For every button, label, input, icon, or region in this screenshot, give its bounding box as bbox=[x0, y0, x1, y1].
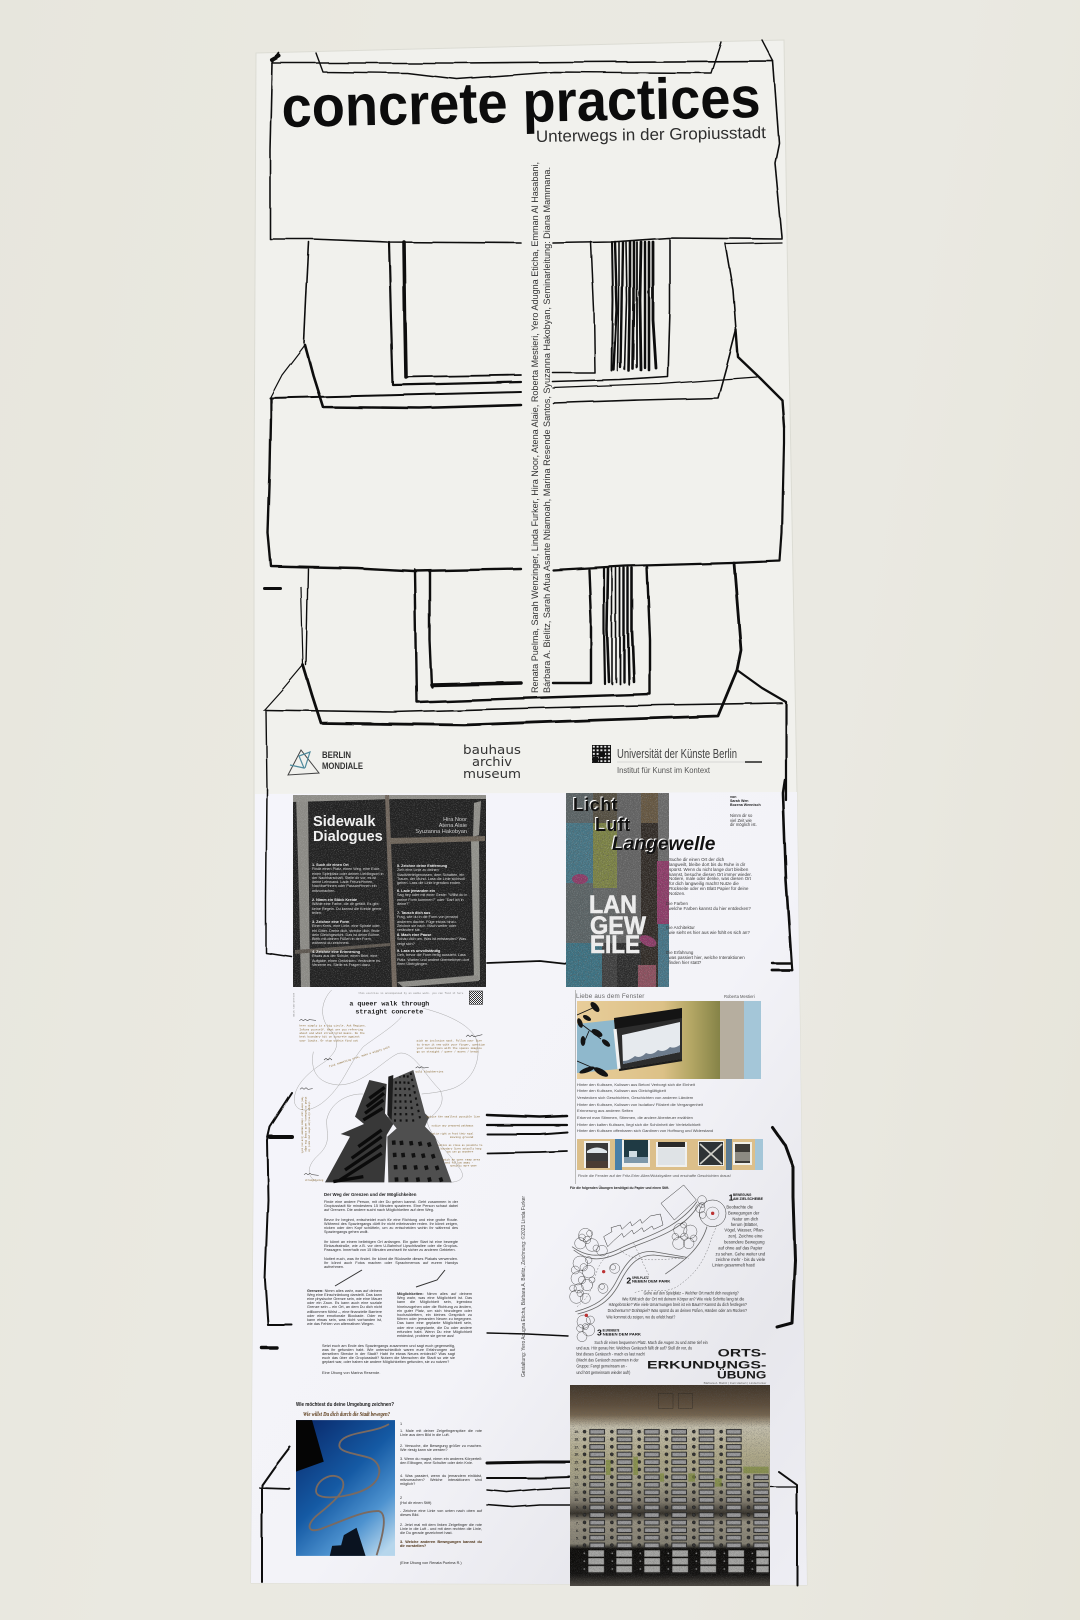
text: station 3 bbox=[576, 1340, 708, 1375]
intro paragraphs: Ihr könnt an einem beliebigen Ort anfangen. Ein guter Start ist eine bewegte Einkaufsstraße, wie z.B. vor dem U-Bahnhof Lipschitzallee oder die Gropius-Passagen. Innerhalb von 15 Minuten wechselt ihr sicher zu anderen Gebieten. bbox=[324, 1240, 458, 1252]
floor numbers: 7. bbox=[576, 1521, 579, 1525]
panel: Licht Luft Langewelle bbox=[566, 793, 761, 987]
upper window bbox=[389, 242, 521, 385]
vertical credits: Renata Puelma, Sarah Wenzinger, Linda Furker, Hira Noor, Atena Alaie, Roberta Mestieri, Yero Adugna Eticha, Emman Al Hasabani, bbox=[530, 162, 541, 693]
text: station 3: (Macht das Geräusch zusammen in der bbox=[576, 1357, 639, 1362]
intro paragraphs: Bevor ihr beginnt, entscheidet euch für eine Richtung und eine grobe Route. Während des Spaziergangs dürft ihr nicht miteinander reden. Ihr könnt zeigen, nicken oder den Kopf schütteln, um zu entscheiden wohin ihr während des Spaziergangs gehen wollt. bbox=[324, 1218, 458, 1234]
heading: Wie möchtest du deine Umgebung zeichnen? bbox=[296, 1402, 394, 1408]
text: station 2: Gehe auf den Spielplatz – Welcher Ort macht dich neugierig? bbox=[643, 1291, 739, 1296]
title words: Luft bbox=[595, 815, 631, 835]
pointer lines bbox=[334, 1270, 446, 1288]
Moeglichkeiten column: Möglichkeiten: Nimm alles auf deinem Weg wahr, was eine Möglichkeit ist. Das kann die Möglichkeit sein, irgendwo hineinzugehen oder die Richtung zu ändern, ein guter Platz, um sich hinzulegen oder hochzuklettern, ein kleines Gespräch zu führen oder jemanden Neuen zu begegnen. Das kann eine geplante Möglichkeit sein, oder eine ungeplante, die Du oder andere erfunden habt. Wenn Du eine Möglichkeit entdeckst, probiere sie gerne aus! bbox=[397, 1292, 472, 1338]
moss patches bbox=[606, 1457, 769, 1487]
orange walk notes: notice right on front their equal bbox=[432, 1132, 474, 1136]
instruction text: Notizen. bbox=[669, 891, 685, 896]
steps right column: Sag hey oder mit einer Geste: "Willst du in meine Form kommen?" oder "Darf ich in deine?" bbox=[397, 893, 467, 906]
orange walk notes: notice the smallest possible line bbox=[427, 1114, 480, 1118]
text: station 3: bist dieses Geräusch - mach es laut nach! bbox=[576, 1352, 645, 1357]
glitched word LANGEWEILE: LAN bbox=[589, 891, 637, 919]
authors: Syuzanna Hakobyan bbox=[415, 829, 467, 835]
QR code bbox=[469, 991, 483, 1004]
floor numbers: 4. bbox=[576, 1544, 579, 1548]
orange walk notes: go on straight / queer / moves / bends bbox=[417, 1050, 479, 1054]
steps left column: 1. Such dir einen Ort bbox=[312, 863, 349, 867]
orange walk notes: to trace it new with your finger, question bbox=[417, 1042, 486, 1046]
orange walk notes: stand in between, walk along the edge bbox=[304, 1097, 308, 1152]
poem lines: Hinter den Kulissen, Kulissen aus Gleichgültigkeit bbox=[577, 1088, 666, 1093]
orange walk notes: boundary lines actually hang bbox=[441, 1146, 482, 1150]
floor numbers: 8. bbox=[576, 1514, 579, 1518]
steps left column: Einen Kreis, eine Linie, eine Spirale oder ein Gitter. Drehe dich, strecke dich, finde dein Gleichgewicht. Das ist deine Bühne. Bleib mit deinen Füßen in der Form, während du zeichnest. bbox=[312, 924, 380, 945]
map: paths bbox=[572, 1202, 707, 1314]
logo: Berlin Mondiale: MONDIALE bbox=[322, 761, 363, 772]
title: Orts-Erkundungs-Uebung: ORTS- bbox=[717, 1348, 767, 1360]
wandering route lines bbox=[294, 990, 478, 1182]
steps left column: Etwas aus der Schule, einen Brief, eine Aufgabe, einen Gedanken. Verändere es. Verzerre es. Stelle es Fragen dazu. bbox=[312, 954, 381, 967]
instructions first part: 1 bbox=[400, 1422, 402, 1426]
text: station 1: auf ohne auf das Papier bbox=[718, 1245, 763, 1250]
steps right column: Geh, bevor die Form fertig aussieht. Lass Platz. Warten und andere übernehmen dort ihren Übergängen. bbox=[397, 953, 469, 966]
tower photograph: left block bbox=[325, 1080, 393, 1182]
text: station 1: zeichne mehr - bis du viele bbox=[715, 1257, 765, 1262]
logos row bbox=[287, 742, 762, 781]
instructions second part: 3. Welche anderen Bewegungen kannst du dir vorstellen? bbox=[400, 1540, 482, 1548]
poem lines: Erinnerung aus anderen Seiten bbox=[577, 1108, 633, 1113]
instruction text bbox=[666, 857, 752, 965]
steps right column: 8. Mach eine Pause bbox=[397, 933, 431, 937]
orange walk notes: Inform yourself. What are you referring bbox=[299, 1027, 363, 1031]
title: Orts-Erkundungs-Uebung bbox=[647, 1348, 767, 1381]
floor numbers: 14. bbox=[574, 1468, 579, 1472]
small sign bbox=[658, 1393, 692, 1408]
credits and note: dir möglich ist. bbox=[730, 822, 757, 827]
instruction text: wie sieht es hier aus wie fühlt es sich an? bbox=[668, 930, 750, 935]
heading: station 1 bbox=[728, 1193, 763, 1203]
orange walk notes: you can go anywhere bbox=[447, 1150, 474, 1154]
instruction text: was passiert hier, welche Interaktionen bbox=[668, 955, 745, 960]
map: trees bbox=[569, 1196, 706, 1342]
logo: bauhaus archiv museum: archiv bbox=[472, 754, 513, 769]
text: station 3: Such dir einen bequemen Platz. Mach die Augen zu und atme tief ein bbox=[594, 1340, 708, 1345]
title words: Licht bbox=[573, 795, 618, 815]
panel rule bbox=[574, 990, 577, 1184]
exercise credit: Eine Übung von Marina Resende. bbox=[322, 1370, 380, 1375]
instruction text: finden hier statt? bbox=[668, 960, 701, 965]
vertical credits bbox=[530, 162, 553, 693]
authors: Atena Alaie bbox=[439, 823, 467, 829]
heading: station 2 bbox=[626, 1275, 670, 1285]
poem lines: Hinter den Kulissen, Kulissen aus Beton/ Verborgt sich die Einheit bbox=[577, 1082, 695, 1086]
audio walk note: this exercise is accompanied by an audio walk. you can find it here bbox=[358, 991, 463, 995]
logo: Berlin Mondiale bbox=[288, 750, 363, 775]
orange walk notes: your connections with the spaces imagine bbox=[417, 1046, 482, 1050]
text: station 2 bbox=[606, 1291, 747, 1320]
steps right column: Frag, wie du in die Form von jemand anderem dachte. Füge etwas hinzu. Zeichne sie nach. Mach weiter oder verändere sie. bbox=[397, 915, 458, 932]
logo: Universitaet der Kuenste Berlin: Institut für Kunst im Kontext bbox=[617, 766, 711, 775]
panel: Sidewalk Dialogues bbox=[293, 795, 486, 987]
panel title: straight concrete bbox=[355, 1008, 423, 1016]
instructions second part: 2 bbox=[400, 1496, 402, 1500]
text: station 1: Natur um dich bbox=[732, 1216, 759, 1221]
orange walk notes: notice any prepared pathways bbox=[432, 1124, 474, 1128]
panel: Orts-Erkundungs-Übung bbox=[569, 1184, 767, 1385]
panel: Der Weg der Grenzen und der Möglichkeiten bbox=[307, 1192, 472, 1375]
floor numbers: 12. bbox=[574, 1483, 579, 1487]
text: station 3: Gruppe: Fangt gemeinsam an - bbox=[576, 1363, 627, 1368]
orange walk notes: your limits. Or stop within find out bbox=[299, 1038, 358, 1042]
floor numbers: 10. bbox=[574, 1498, 579, 1502]
credits and note bbox=[730, 795, 761, 827]
map: building outlines bbox=[603, 1185, 696, 1247]
panel title bbox=[349, 1000, 429, 1016]
orange walk notes: notice as close as possible to bbox=[438, 1143, 483, 1147]
tower photograph: right block bbox=[387, 1070, 452, 1182]
steps right column: 5. Zeichne deine Entfernung bbox=[397, 864, 447, 868]
orange walk notes: and follow away - bbox=[445, 1160, 474, 1164]
intro paragraphs: Notiert euch, was ihr findet. Ihr könnt die Rückseite dieses Plakats verwenden. Ihr könnt auch Fotos machen oder Sprachmemos auf eurem Handys aufnehmen. bbox=[324, 1257, 458, 1269]
orange walk notes: straightening bbox=[305, 1178, 324, 1182]
steps right column: 7. Tausch dich aus bbox=[397, 911, 430, 915]
handwritten markers bbox=[299, 1019, 482, 1175]
intro paragraphs: Finde eine andere Person, mit der Du gehen kannst. Geht zusammen in der Gropiusstadt für mindestens 15 Minuten spazieren. Eine Person schaut dabei auf Grenzen. Die andere sucht nach Möglichkeiten auf dem Weg. bbox=[324, 1200, 458, 1212]
instructions first part: 3. Wenn du magst, nimm ein anderes Körperteil: den Ellbogen, eine Schulter oder dein Knie. bbox=[400, 1457, 482, 1465]
credits and note: Sarah Wen bbox=[730, 799, 749, 803]
upper column bbox=[304, 242, 309, 343]
text: station 3: und hört gemeinsam wieder auf!) bbox=[576, 1370, 631, 1375]
lower column bbox=[306, 567, 308, 665]
orange walk notes: about and what street/grid means. Do the bbox=[299, 1031, 365, 1035]
floor numbers: 19. bbox=[574, 1430, 579, 1434]
text: station 2: Hängebrücke? Wie viele Umarmungen breit ist ein Baum? Kannst du dich festlegen? bbox=[608, 1302, 747, 1307]
instructions second part bbox=[400, 1496, 482, 1565]
glitched word LANGEWEILE bbox=[589, 891, 646, 959]
logo: Universitaet der Kuenste Berlin: Universität der Künste Berlin bbox=[617, 746, 737, 761]
heading: station 2: SPIELPLATZ bbox=[632, 1276, 649, 1280]
intro paragraphs bbox=[324, 1200, 458, 1269]
instruction text: Rückseite oder ein Blatt Papier für deine bbox=[669, 886, 748, 891]
steps right column: 9. Lass es unvollständig bbox=[397, 949, 440, 953]
poem lines: Hinter den Kulissen offenbaren sich Gardinen von Hoffnung und Widerstand bbox=[577, 1128, 713, 1133]
text: station 1: besondere Bewegung bbox=[724, 1240, 765, 1245]
lower stripes bbox=[604, 568, 634, 684]
floor numbers: 16. bbox=[574, 1453, 579, 1457]
instructions first part: 2. Versuche, die Bewegung größer zu machen. Wie riesig kann sie werden? bbox=[400, 1444, 482, 1452]
steps left column: 4. Zeichne eine Erinnerung bbox=[312, 950, 360, 954]
logo: Berlin Mondiale: BERLIN bbox=[322, 750, 351, 761]
logo: bauhaus archiv museum: museum bbox=[463, 766, 521, 781]
instruction text: Suche dir einen Ort der dich bbox=[669, 857, 724, 862]
collage image bbox=[566, 793, 669, 987]
text: station 1: zu sehen. Gehe weiter und bbox=[715, 1251, 766, 1256]
orange walk notes: change direction when you want to bbox=[307, 1102, 311, 1152]
text: station 1: Beobachte die bbox=[726, 1205, 753, 1210]
credits and note: viel Zeit wie bbox=[730, 818, 752, 823]
steps right column bbox=[397, 864, 469, 966]
poem lines: Hinter den kalten Kulissen, liegt sich die Schönheit der Verletzlichkeit bbox=[577, 1122, 700, 1127]
instruction text: Die Architektur bbox=[666, 925, 695, 930]
orange walk notes bbox=[291, 992, 486, 1182]
lower window bbox=[415, 567, 650, 702]
title words bbox=[573, 795, 715, 855]
panel: Wie möchtest du deine Umgebung zeichnen bbox=[296, 1402, 482, 1565]
photo grain bbox=[570, 1385, 770, 1586]
instructions first part bbox=[400, 1422, 482, 1486]
panel title bbox=[313, 814, 383, 845]
logo: bauhaus archiv museum bbox=[463, 742, 521, 781]
note: materials needed: Für die folgenden Übungen benötigst du Papier und einen Stift. bbox=[570, 1186, 669, 1190]
floor numbers: 11. bbox=[574, 1491, 579, 1495]
instructions second part: 2. Jetzt mal mit dem linken Zeigefinger die rote Linie in die Luft - und mit dem rechten die Linie, die Du gerade gezeichnet hast. bbox=[400, 1523, 482, 1535]
floor numbers: 6. bbox=[576, 1529, 579, 1533]
poem lines: Verstecken sich Geschichten, Geschichten von anderen Ländern bbox=[577, 1095, 693, 1100]
subtitle: Unterwegs in der Gropiusstadt bbox=[536, 124, 766, 146]
orange walk notes: find something else, make a wiggly path bbox=[328, 1045, 391, 1068]
pavement photo bbox=[293, 795, 486, 987]
instruction text: welche Farben kannst du hier entdecken? bbox=[668, 906, 751, 911]
credits and note: von bbox=[730, 795, 736, 799]
floor numbers: 9. bbox=[576, 1506, 579, 1510]
glitched word LANGEWEILE: GEW bbox=[590, 912, 646, 940]
heading: station 3 bbox=[597, 1328, 641, 1338]
instruction text: langweilt, bleibe dort bis du Ruhe in dir bbox=[669, 862, 745, 867]
text: station 1: zen). Zeichne eine bbox=[728, 1234, 763, 1239]
instructions second part: (Eine Übung von Renata Puelma R.) bbox=[400, 1561, 462, 1565]
floor numbers bbox=[574, 1430, 579, 1548]
heading: station 3: BLUMENBEETE bbox=[602, 1329, 619, 1333]
orange walk notes: pick an inclusion spot. Follow your line bbox=[417, 1039, 482, 1043]
instructions first part: 1. Male mit deiner Zeigefingerspitze die rote Linie aus dem Bild in die Luft. bbox=[400, 1429, 482, 1437]
floor numbers: 18. bbox=[574, 1438, 579, 1442]
poem lines: Hinter den Kulissen, Kulissen von Isolation/ Flüstert die Vergangenheit bbox=[577, 1102, 703, 1107]
title block bbox=[281, 65, 766, 693]
text: station 2: Drachenturm? Drahtspiel? Was spürst du an deinen Füßen, Händen oder am Rücken? bbox=[607, 1308, 747, 1313]
text: station 1: Vögel, Wasser, Pflan- bbox=[724, 1228, 765, 1233]
poem lines: Erkennt man Stimmen, Stimmen, die andere Abenteuer erzählen bbox=[577, 1115, 693, 1120]
sky photograph with rope line bbox=[296, 1420, 395, 1556]
panel: doorbell board photograph bbox=[570, 1385, 770, 1586]
orange walk notes: pick an open ramp area bbox=[443, 1158, 480, 1162]
author: Roberta Mestieri bbox=[724, 994, 755, 999]
top block outline bbox=[272, 53, 782, 243]
Grenzen column: Grenzen: Nimm alles wahr, was auf deinem Weg eine Einschränkung darstellt. Das kann eine physische Grenze sein, wie eine Mauer oder ein Zaun. Es kann auch eine soziale Grenze sein – ein Ort, an dem Du dich nicht willkommen fühlst –, eine finanzielle Barriere oder eine emotionale Blockade. Oder es kann etwas sein, was nicht vorhanden ist, wie das Fehlen von alternativen Wegen. bbox=[307, 1288, 382, 1326]
heading: station 2: 2 bbox=[626, 1275, 631, 1285]
text: station 1: herum (Blätter, bbox=[730, 1222, 758, 1227]
logo: bauhaus archiv museum: bauhaus bbox=[463, 742, 521, 757]
instruction text: für dich langweilig macht! Nutze die bbox=[669, 881, 739, 886]
middle block bbox=[270, 392, 521, 398]
steps left column: Wähle eine Farbe, die dir gefällt. Es gibt keine Regeln. Du kannst die Kreide gerne teilen. bbox=[312, 902, 381, 915]
credits and note: Nimm dir so bbox=[730, 813, 752, 818]
heading: station 3: 3 bbox=[597, 1328, 602, 1338]
strip caption: Finde die Fenster auf der Fritz-Erler-Allee/Wutzkyallee und erschaffe Geschichten draus! bbox=[578, 1173, 731, 1178]
title: Orts-Erkundungs-Uebung: ÜBUNG bbox=[717, 1368, 766, 1381]
steps left column: Finde einen Platz, einen Weg, eine Ecke, einen Spielplatz oder deinen Lieblingsort in der Nachbarschaft. Stelle dir vor, es ist deine Leinwand. Lade Freund*innen, Nachbar*innen oder Passant*innen ein mitzumachen. bbox=[312, 867, 384, 893]
heading: station 1: AM ZIELSCHEIBE bbox=[733, 1197, 763, 1201]
heading: station 1: 1 bbox=[728, 1193, 733, 1203]
script subtitle: Wie willst Du dich durch die Stadt bewegen? bbox=[303, 1411, 390, 1418]
floor numbers: 17. bbox=[574, 1445, 579, 1449]
panel: Liebe aus dem Fenster bbox=[575, 990, 763, 1184]
instruction text: Die Erfahrung bbox=[666, 950, 693, 955]
floor numbers: 13. bbox=[574, 1475, 579, 1479]
upper stripes bbox=[612, 242, 656, 371]
panel title: Dialogues bbox=[313, 829, 383, 845]
text: station 3: und aus. Hör genau hin: Welches Geräusch fällt dir auf? Stell dir vor, du bbox=[576, 1346, 692, 1351]
orange walk notes: moving ground bbox=[450, 1135, 474, 1139]
panel: a queer walk through straight concrete bbox=[293, 990, 486, 1184]
orange walk notes: feel where your steps become line and soft bbox=[301, 1097, 305, 1154]
heading: concrete practices: concrete practices bbox=[281, 65, 761, 140]
steps left column: 3. Zeichne eine Form bbox=[312, 920, 349, 924]
glitched word LANGEWEILE: EILE bbox=[590, 931, 640, 959]
orange walk notes: wild blackberries bbox=[416, 1070, 444, 1074]
text: station 2: Wie fühlt sich der Ort mit deinem Körper an? Wie viele Schritte lang ist die bbox=[622, 1296, 745, 1301]
instructions first part: 4. Was passiert, wenn du jemandem einlädst, mitzumachen? Welche Interaktionen sind möglich? bbox=[400, 1474, 482, 1486]
panel title: a queer walk through bbox=[349, 1000, 429, 1008]
instruction text: Die Farben bbox=[666, 901, 688, 906]
steps right column: 6. Lade jemanden ein bbox=[397, 889, 435, 893]
panel title: Sidewalk bbox=[313, 814, 375, 830]
window strip photograph bbox=[577, 1139, 763, 1170]
heading: station 2: NEBEN DEM PARK bbox=[632, 1280, 670, 1284]
closing paragraph: Setzt euch am Ende des Spaziergangs zusammen und sagt euch gegenseitig, was ihr gefunden habt. Wie unterschiedlich waren eure Erfahrungen auf derselben Strecke in der Stadt? Habt ihr etwas Neues entdeckt? Was sagt euch das über die Gropiusstadt? Nutzen die Menschen die Stadt so wie sie geplant war, oder haben sie andere Möglichkeiten gefunden, sie zu nutzen? bbox=[322, 1344, 455, 1364]
orange walk notes: specific more wave bbox=[450, 1164, 477, 1168]
window photograph bbox=[577, 1001, 761, 1079]
authors: Bárbara A. Bielitz | Inari Hiebert | Linda Furker bbox=[703, 1381, 766, 1385]
heading: Der Weg der Grenzen und der Möglichkeiten bbox=[324, 1192, 416, 1197]
title: Orts-Erkundungs-Uebung: ERKUNDUNGS- bbox=[647, 1359, 767, 1371]
authors: Hira Noor bbox=[443, 817, 467, 823]
map: target circle bbox=[699, 1200, 726, 1227]
text: station 2: Wie kommst du zeigen, wo du erlebt hast? bbox=[606, 1315, 676, 1320]
steps left column: 2. Nimm ein Stück Kreide bbox=[312, 898, 357, 902]
poem lines bbox=[577, 1082, 713, 1133]
title words: Langewelle bbox=[612, 834, 715, 855]
instructions second part: (Hol dir einen Stift) bbox=[400, 1501, 431, 1505]
heading: station 3: NEBEN DEM PARK bbox=[602, 1332, 641, 1336]
authors bbox=[415, 817, 467, 835]
sheet-two line continuations: left bbox=[266, 790, 292, 957]
floor numbers: 5. bbox=[576, 1537, 579, 1541]
heading: Liebe aus dem Fenster bbox=[576, 993, 645, 1000]
logo: Universitaet der Kuenste Berlin bbox=[592, 745, 762, 775]
heading: station 1: BEWEGUNG bbox=[733, 1193, 751, 1197]
text: station 1 bbox=[712, 1205, 766, 1268]
text: station 1: Linien gesammelt hast! bbox=[712, 1263, 755, 1268]
vertical credits: Bárbara A. Bielitz, Sarah Afua Asante Ntiamoah, Marina Resende Santos, Syuzanna Hakobyan, Seminarleitung: Diana Mammana. bbox=[542, 167, 553, 693]
instruction text: Notiere, male oder denke, was diesen Ort bbox=[669, 876, 751, 881]
instructions second part: - Zeichne eine Linie von unten nach oben auf dieses Bild. bbox=[400, 1509, 482, 1517]
instruction text: spürst. Wenn du nicht lange dort bleiben bbox=[669, 867, 748, 872]
orange walk notes: here simply is a big circle. Ask Regions. bbox=[299, 1024, 366, 1028]
instruction text: kannst, besuche diesen Ort immer wieder. bbox=[669, 872, 752, 877]
steps left column bbox=[312, 863, 384, 967]
text: station 1: Bewegungen der bbox=[728, 1210, 760, 1215]
floor numbers: 15. bbox=[574, 1460, 579, 1464]
bell plates grid bbox=[583, 1428, 769, 1574]
orange walk notes: best boundary bit on concrete against bbox=[299, 1035, 360, 1039]
steps right column: Schau dich um. Was ist entstanden? Was zeigt sich? bbox=[397, 937, 466, 946]
steps right column: Zieh eine Linie zu deinen Stadtviertelgenossen, dem Schatten, ein Traum, der Mund. Lass die Linie sichtvoll gehen. Lass die Linie irgendwo enden. bbox=[397, 868, 465, 885]
credits and note: Bozena Wennisch bbox=[730, 803, 761, 807]
